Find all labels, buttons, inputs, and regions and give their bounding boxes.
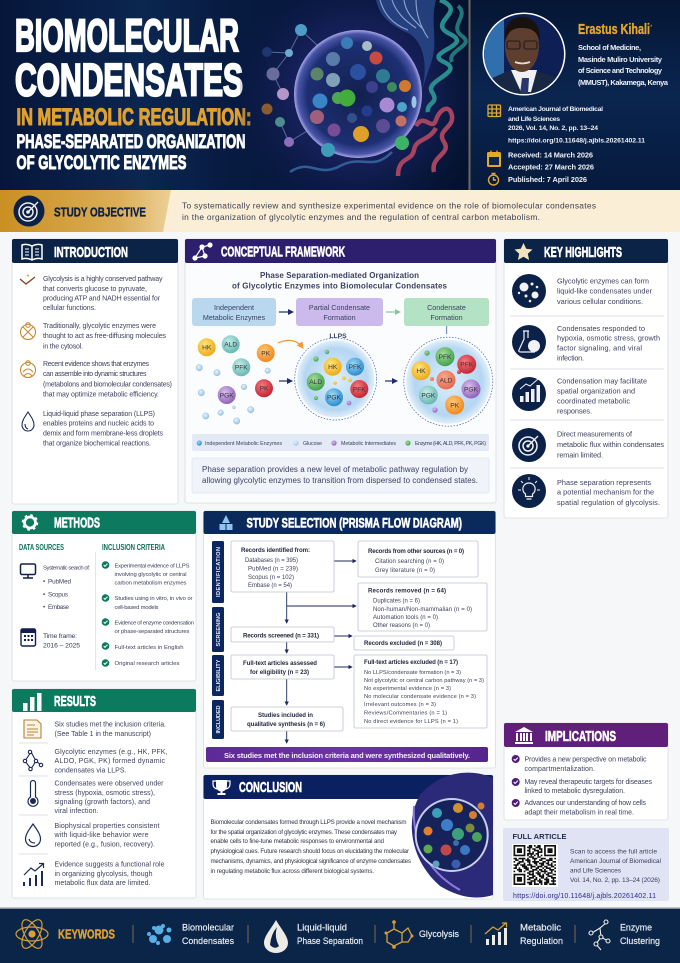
data sources list: Systematic search of: — [43, 566, 90, 572]
stage: partial condensate — [296, 298, 383, 326]
stage: independent enzymes — [192, 298, 276, 326]
highlight: flask: Condensates responded to — [557, 324, 645, 333]
statement — [192, 458, 489, 493]
keyword: enzyme clustering: Enzyme — [620, 922, 652, 934]
author details: Masinde Muliro University — [578, 55, 663, 64]
text: LLPS: Liquid-liquid phase separation (LLPS) — [43, 411, 155, 418]
text: glycolysis — [43, 276, 163, 312]
icon: star — [514, 243, 532, 260]
icon: assembly — [20, 361, 36, 378]
time frame: Time frame: — [43, 633, 77, 640]
keywords band — [0, 908, 680, 963]
conclusion text: physiological cues. Future research should focus on elucidating the molecular — [210, 848, 409, 855]
title block: PHASE-SEPARATED ORGANIZATION — [16, 132, 245, 153]
heading: keywords: KEYWORDS — [58, 926, 115, 942]
data sources list: • — [43, 578, 45, 586]
result 4: Biophysical properties consistent — [54, 823, 160, 830]
icon: open book — [22, 244, 42, 260]
box: records identified: Records identified from: — [241, 547, 310, 554]
checks list: or phase-separated structures — [114, 629, 190, 635]
result 1: (See Table 1 in the manuscript) — [54, 731, 151, 738]
heading: key highlights: KEY HIGHLIGHTS — [544, 245, 622, 261]
keyword: biomolecular condensates: Biomolecular — [182, 922, 234, 934]
full condensate droplet: ALD — [440, 377, 453, 384]
text: recent evidence: can assemble into dynamic structures — [43, 371, 147, 378]
text: glycolysis: cellular functions. — [43, 305, 96, 312]
time frame: 2016 – 2025 — [43, 642, 80, 650]
journal citation: https://doi.org/10.11648/j.ajbls.20261402.11 — [508, 138, 645, 144]
partial condensate droplet: PFK — [353, 386, 366, 393]
highlight: chart: spatial organization and — [557, 386, 635, 396]
box: records screened — [231, 627, 334, 642]
implications list: May reveal therapeutic targets for diseases — [524, 779, 652, 786]
heading: methods: METHODS — [54, 516, 100, 532]
box: other sources — [358, 541, 478, 577]
conclusion text: in regulating metabolic flux across different biological systems. — [210, 868, 374, 875]
stage tabs: ELIGIBILITY — [216, 659, 222, 692]
stage: independent enzymes: Independent — [214, 303, 254, 312]
stage tabs: INCLUDED — [216, 706, 222, 734]
conclusion text: mechanisms, dynamics, and physiological significance of enzyme condensates — [210, 858, 411, 865]
highlight: chart — [512, 376, 647, 416]
keyword: enzyme clustering: Clustering — [620, 936, 660, 947]
journal citation: 2026, Vol. 14, No. 2, pp. 13–24 — [508, 125, 598, 132]
full condensate droplet — [404, 337, 493, 426]
keyword: enzyme clustering — [589, 920, 660, 950]
implications list: compartmentalization. — [524, 766, 595, 773]
text: recent evidence: that may optimize metabolic efficiency. — [43, 392, 159, 398]
stage tabs: SCREENING — [216, 612, 222, 646]
data sources list: • — [43, 592, 45, 598]
icon: stopwatch — [488, 174, 498, 185]
icon: institution — [515, 727, 533, 744]
checks list: Evidence of enzyme condensation — [114, 620, 194, 626]
author details: (MMUST), Kakamega, Kenya — [578, 78, 669, 87]
implications list: adapt their metabolism in real time. — [524, 810, 634, 816]
heading: conclusion: CONCLUSION — [239, 780, 302, 796]
result 3: Condensates were observed under — [54, 780, 164, 788]
panel: key highlights — [504, 239, 668, 518]
heading: full article: FULL ARTICLE — [512, 832, 566, 841]
keyword: metabolic regulation — [485, 922, 563, 947]
dispersed enzymes — [196, 335, 275, 424]
data sources list: PubMed — [48, 578, 71, 586]
text: glycolysis: that converts glucose to pyruvate, — [43, 286, 147, 293]
keyword: metabolic regulation: Metabolic — [520, 922, 561, 934]
legend: Enzyme (HK, ALD, PFK, PK, PGK) — [415, 441, 486, 447]
implications list: linked to metabolic dysregulation. — [524, 788, 625, 795]
box: full-text excluded: No direct evidence for LLPS (n = 1) — [364, 719, 458, 725]
journal citation — [508, 106, 645, 144]
result 3: signaling (growth factors), and — [54, 799, 150, 806]
box: records removed: Other reasons (n = 0) — [373, 623, 430, 629]
highlight: lightbulb: a potential mechanism for the — [557, 488, 654, 496]
box: studies included: Studies included in — [258, 712, 313, 719]
objective text: To systematically review and synthesize experimental evidence on the role of biomolecular condensates — [182, 200, 596, 210]
highlight: droplets — [512, 274, 653, 308]
box: records removed — [358, 583, 487, 631]
full condensate droplet: HK — [416, 368, 426, 375]
highlight: droplets: Glycolytic enzymes can form — [557, 276, 649, 286]
box: full-text excluded: No experimental evidence (n = 3) — [364, 686, 451, 692]
keyword: liquid-liquid phase separation: Liquid-liquid — [297, 922, 347, 934]
banner: summary: Six studies met the inclusion criteria and were synthesized qualitatively. — [224, 751, 470, 760]
box: studies included: qualitative synthesis (n = 6) — [247, 721, 325, 728]
result 5 — [23, 862, 165, 887]
box: records removed: Non-human/Non-mammalian (n = 0) — [373, 607, 472, 613]
dispersed enzymes: PGK — [220, 392, 234, 399]
icon: calendar — [487, 150, 501, 167]
box: full-text excluded: Full-text articles excluded (n = 17) — [364, 659, 458, 666]
checks list: Original research articles — [114, 661, 180, 667]
box: full-text assessed: for eligibility (n = 23) — [250, 669, 309, 676]
header banner — [0, 0, 680, 190]
result 2: ALDO, PGK, PK) formed dynamic — [54, 758, 166, 765]
full condensate droplet: PK — [450, 402, 460, 409]
box: records screened: Records screened (n = 331) — [243, 632, 319, 640]
illustration: biomolecular condensate droplet — [240, 0, 469, 190]
box: full-text excluded: Reviews/Commentaries (n = 1) — [364, 710, 447, 716]
result 3: viral infection. — [54, 808, 99, 815]
icon: monitor — [20, 564, 36, 578]
article text: Vol. 14, No. 2, pp. 13–24 (2026) — [570, 877, 660, 884]
diagram subtitle: of Glycolytic Enzymes into Biomolecular Condensates — [232, 282, 448, 290]
legend: Glucose — [303, 441, 322, 447]
label: LLPS: LLPS — [329, 333, 347, 340]
highlight: flask: factor signaling, and viral — [557, 344, 642, 352]
statement: Phase separation provides a new level of metabolic pathway regulation by — [202, 465, 468, 474]
result 3 — [28, 780, 164, 815]
title block: BIOMOLECULAR — [15, 10, 239, 61]
subheading: data sources: DATA SOURCES — [19, 543, 64, 552]
legend: Independent Metabolic Enzymes — [205, 441, 282, 447]
checks list: involving glycolytic or central — [114, 572, 186, 578]
author portrait — [482, 12, 566, 96]
highlight: target — [512, 428, 664, 462]
title block: IN METABOLIC REGULATION: — [16, 104, 252, 131]
author details: School of Medicine, — [578, 43, 641, 52]
box: records removed: Automation tools (n = 0) — [373, 615, 438, 621]
article text: American Journal of Biomedical — [570, 858, 662, 865]
box: records excluded — [354, 636, 454, 650]
author details — [578, 22, 669, 87]
text: LLPS: that organize biochemical reactions. — [43, 440, 151, 448]
divider — [468, 0, 470, 190]
title block: OF GLYCOLYTIC ENZYMES — [16, 153, 186, 174]
keyword: liquid-liquid phase separation: Phase Separation — [297, 936, 363, 947]
checks list: Experimental evidence of LLPS — [114, 564, 190, 570]
highlight: target: Direct measurements of — [557, 430, 633, 438]
box: other sources: Citation searching (n = 0) — [375, 559, 444, 565]
heading: conceptual framework: CONCEPTUAL FRAMEWORK — [221, 244, 345, 260]
text: traditionally — [43, 323, 166, 350]
panel: results — [12, 689, 196, 898]
box: studies included — [231, 707, 343, 731]
text: LLPS: enables proteins and nucleic acids to — [43, 420, 154, 428]
panel: methods — [12, 511, 196, 681]
box: full-text excluded: Not glycolytic or central carbon pathway (n = 3) — [364, 678, 484, 684]
flow arrows — [287, 561, 356, 743]
keyword: glycolysis — [384, 920, 459, 949]
icon: journal — [488, 105, 500, 116]
icon: gear — [23, 516, 37, 530]
panel: conclusion — [204, 773, 493, 899]
full condensate droplet: PGK — [421, 392, 436, 399]
full condensate droplet: PGK — [464, 386, 479, 393]
QR code — [512, 844, 558, 887]
text: glycolysis: producing ATP and NADH essential for — [43, 296, 161, 302]
result 2: Glycolytic enzymes (e.g., HK, PFK, — [54, 749, 168, 756]
checks list — [102, 561, 194, 667]
stage: condensate: Condensate — [427, 303, 466, 312]
result 4: reported (e.g., fusion, recovery). — [54, 842, 155, 848]
icon: bars — [23, 693, 42, 711]
data sources list: Embase — [48, 604, 69, 611]
icon: funnel — [220, 515, 232, 530]
text: traditionally: Traditionally, glycolytic enzymes were — [43, 323, 156, 330]
subheading: inclusion criteria: INCLUSION CRITERIA — [102, 543, 165, 552]
legend — [192, 434, 489, 451]
arrow — [279, 311, 293, 313]
highlight: lightbulb: Phase separation represents — [557, 478, 651, 487]
conclusion text: enable cells to fine-tune metabolic responses to environmental and — [210, 838, 385, 845]
study objective band — [0, 190, 680, 232]
highlight: chart: responses. — [557, 406, 592, 416]
diagram subtitle: Phase Separation-mediated Organization — [260, 271, 419, 280]
highlight: lightbulb — [512, 474, 660, 508]
data sources list: • — [43, 604, 45, 611]
implications list: Provides a new perspective on metabolic — [524, 756, 647, 764]
result 3: stress (hypoxia, osmotic stress), — [54, 790, 155, 797]
panel: full article — [503, 828, 669, 901]
data sources list — [43, 566, 90, 611]
DOI link: https://doi.org/10.11648/j.ajbls.20261402.11 — [513, 893, 656, 900]
box: records identified: Embase (n = 54) — [248, 583, 292, 589]
arrow — [385, 380, 397, 382]
author details: of Science and Technology — [578, 66, 663, 75]
legend: Metabolic Intermediates — [341, 441, 396, 447]
text: LLPS: demix and form membrane-less droplets — [43, 430, 164, 438]
box: full-text excluded: Irrelevant outcomes (n = 3) — [364, 702, 436, 708]
keyword: glycolysis: Glycolysis — [419, 929, 459, 940]
box: full-text excluded: No LLPS/condensate formation (n = 3) — [364, 670, 461, 676]
panel: introduction — [12, 239, 178, 504]
icon: water drop — [22, 412, 34, 431]
stage tabs — [212, 541, 224, 739]
article text: Scan to access the full article — [570, 848, 657, 856]
heading: study objective: STUDY OBJECTIVE — [54, 206, 146, 220]
box: full-text assessed — [231, 655, 334, 679]
highlight: flask: infection. — [557, 354, 584, 362]
text: recent evidence: (metabolons and biomolecular condensates) — [43, 382, 172, 388]
text: traditionally: in the cytosol. — [43, 344, 83, 350]
icon: network — [192, 242, 213, 261]
stage: condensate: Formation — [430, 313, 463, 322]
data sources list: Scopus — [48, 592, 68, 598]
dispersed enzymes: HK — [202, 344, 212, 352]
text: recent evidence — [43, 361, 172, 398]
heading: results: RESULTS — [54, 694, 96, 710]
checks list: Studies using in vitro, in vivo or — [114, 596, 193, 602]
panel: conceptual framework — [185, 239, 496, 503]
stage: independent enzymes: Metabolic Enzymes — [203, 313, 266, 322]
box: other sources: Records from other sources (n = 0) — [368, 548, 464, 555]
conclusion text: Biomolecular condensates formed through LLPS provide a novel mechanism — [210, 819, 406, 826]
objective text — [182, 200, 596, 222]
highlight: target: remain limited. — [557, 450, 603, 460]
keyword: biomolecular condensates: Condensates — [182, 936, 234, 947]
implications list: Advances our understanding of how cells — [524, 800, 646, 807]
keyword: biomolecular condensates — [147, 922, 234, 947]
text: LLPS — [43, 411, 164, 448]
highlight: chart: Condensation may facilitate — [557, 376, 647, 386]
box: records identified — [231, 541, 334, 592]
icon: target — [14, 196, 44, 226]
publication dates: Received: 14 March 2026 — [508, 150, 593, 160]
heading: study selection: STUDY SELECTION (PRISMA FLOW DIAGRAM) — [246, 515, 462, 531]
box: records removed: Records removed (n = 64) — [368, 588, 446, 594]
stage: condensate — [404, 298, 489, 326]
highlight: lightbulb: spatial regulation of glycolysis. — [557, 498, 660, 507]
box: records removed: Duplicates (n = 6) — [373, 598, 420, 604]
publication dates: Published: 7 April 2026 — [508, 175, 587, 184]
stage tabs: IDENTIFICATION — [216, 547, 222, 597]
arrow: curved orange — [278, 340, 303, 348]
keyword: liquid-liquid phase separation — [264, 920, 363, 953]
text: traditionally: thought to act as free-diffusing molecules — [43, 333, 166, 340]
journal citation: American Journal of Biomedical — [508, 106, 603, 113]
highlight: chart: coordinated metabolic — [557, 396, 630, 406]
result 5: metabolic flux data are limited. — [54, 880, 151, 887]
dispersed enzymes: PK — [261, 350, 271, 357]
illustration: condensate sphere — [412, 773, 493, 898]
result 4 — [26, 823, 160, 848]
dispersed enzymes: ALD — [224, 342, 237, 348]
article text: and Life Sciences — [570, 868, 622, 874]
partial condensate droplet: PFK — [349, 364, 362, 371]
diagram subtitle — [232, 271, 448, 290]
partial condensate droplet — [295, 338, 377, 420]
partial condensate droplet: PGK — [327, 395, 342, 402]
highlight: droplets: liquid-like condensates under — [557, 286, 653, 296]
dispersed enzymes: PFK — [235, 365, 248, 372]
publication dates: Accepted: 27 March 2026 — [508, 162, 594, 172]
journal citation: and Life Sciences — [508, 116, 560, 123]
result 1 — [24, 720, 166, 738]
conclusion text — [210, 819, 411, 875]
icon: free molecules — [20, 323, 36, 340]
conclusion text: for the spatial organization of glycolytic enzymes. These condensates may — [210, 829, 398, 836]
title block — [15, 10, 252, 174]
result 2 — [23, 749, 168, 774]
box: records identified: Databases (n = 395) — [245, 558, 298, 564]
author details: Erastus Kihali — [578, 22, 650, 38]
statement: allowing glycolytic enzymes to transition from dispersed to condensed states. — [202, 476, 478, 485]
box: full-text excluded: No molecular condensate evidence (n = 3) — [364, 694, 476, 700]
heading: introduction: INTRODUCTION — [54, 245, 128, 261]
partial condensate droplet: HK — [328, 364, 338, 371]
highlight: flask — [512, 324, 660, 362]
heading: implications: IMPLICATIONS — [545, 729, 616, 745]
arrow — [279, 380, 292, 382]
partial condensate droplet: ALD — [309, 379, 322, 386]
box: records excluded: Records excluded (n = 308) — [364, 640, 442, 647]
text: recent evidence: Recent evidence shows that enzymes — [43, 361, 150, 368]
stage: partial condensate: Partial Condensate — [309, 303, 370, 312]
panel: study selection — [204, 511, 496, 768]
box: full-text assessed: Full-text articles assessed — [243, 660, 317, 667]
checks list: cell-based models — [114, 605, 159, 611]
line — [446, 326, 448, 334]
time frame — [43, 633, 80, 650]
result 5: in organizing glycolysis, though — [54, 871, 153, 878]
highlight: target: metabolic flux within condensates — [557, 440, 664, 449]
banner: summary — [206, 747, 488, 762]
stage: partial condensate: Formation — [323, 313, 356, 322]
full condensate droplet: PFK — [439, 354, 452, 361]
box: records identified: PubMed (n = 239) — [248, 566, 298, 572]
icon: calendar — [21, 629, 36, 646]
text: glycolysis: Glycolysis is a highly conserved pathway — [43, 276, 163, 283]
arrow — [386, 311, 400, 313]
icon: pathway chevron — [20, 274, 35, 284]
highlight: flask: hypoxia, osmotic stress, growth — [557, 334, 660, 342]
author details: * — [650, 25, 653, 31]
title block: CONDENSATES — [15, 54, 243, 106]
panel: implications — [504, 723, 668, 820]
checks list: Full-text articles in English — [114, 645, 184, 651]
objective text: in the organization of glycolytic enzymes and the regulation of central carbon metabolism. — [182, 212, 540, 222]
dispersed enzymes: PK — [260, 386, 269, 393]
full condensate droplet: PFK — [460, 362, 474, 369]
implications list — [512, 755, 652, 816]
keyword: metabolic regulation: Regulation — [520, 936, 563, 947]
article text — [570, 848, 662, 884]
icon: trophy — [213, 780, 230, 795]
box: full-text excluded — [354, 655, 487, 728]
result 1: Six studies met the inclusion criteria. — [54, 722, 166, 728]
result 5: Evidence suggests a functional role — [54, 862, 165, 868]
box: records identified: Scopus (n = 102) — [248, 575, 294, 581]
box: other sources: Grey literature (n = 0) — [375, 568, 435, 574]
result 2: condensates via LLPS. — [54, 768, 127, 774]
result 4: with liquid-like behavior were — [54, 832, 149, 839]
checks list: carbon metabolism enzymes — [114, 580, 187, 586]
publication dates — [508, 150, 594, 184]
icon: atom — [16, 917, 48, 951]
highlight: droplets: various cellular conditions. — [557, 297, 643, 306]
